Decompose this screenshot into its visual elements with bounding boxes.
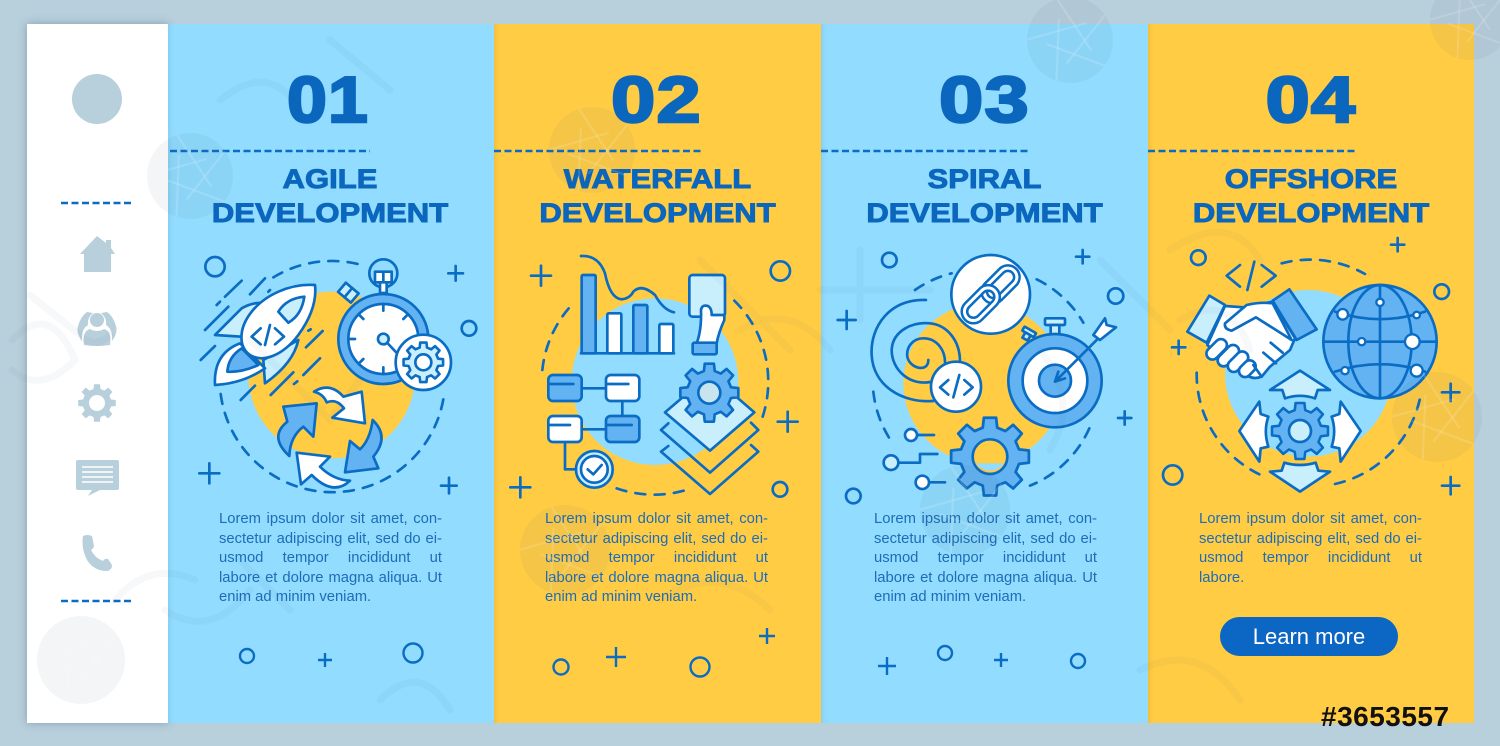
step number: 01: [287, 63, 369, 136]
step number: 02: [611, 63, 702, 136]
icon: settings gear: [78, 384, 116, 422]
heading: [1193, 164, 1430, 228]
body text: Lorem ipsum dolor sit amet, con-: [1199, 511, 1422, 527]
heading: OFFSHORE: [1225, 164, 1397, 194]
illustration: spiral, link, target, gear: [838, 250, 1131, 503]
heading: [212, 164, 448, 228]
illustration: handshake, globe, gear: [1163, 238, 1459, 494]
panel: navigation sidebar: [27, 24, 168, 723]
heading: SPIRAL: [928, 164, 1041, 194]
icon: home: [80, 236, 115, 272]
heading: DEVELOPMENT: [866, 198, 1103, 228]
panel: 01 agile development: [168, 24, 494, 723]
button: learn more: Learn more: [1253, 624, 1365, 649]
heading: AGILE: [283, 164, 377, 194]
body text: sectetur adipiscing elit, sed do ei-: [874, 531, 1097, 547]
logo placeholder circle: [72, 74, 122, 124]
panel: 02 waterfall development: [494, 24, 821, 723]
heading: DEVELOPMENT: [539, 198, 776, 228]
icon: phone: [82, 535, 112, 571]
body text: usmod tempor incididunt ut: [545, 550, 768, 566]
body text: labore.: [1199, 570, 1244, 586]
decorative circles and plus signs: [554, 628, 775, 676]
body text: labore et dolore magna aliqua. Ut: [545, 570, 768, 586]
stock id label: #3653557: [1321, 701, 1450, 732]
body text: Lorem ipsum dolor sit amet, con-: [219, 511, 442, 527]
heading: [539, 164, 776, 228]
body text: sectetur adipiscing elit, sed do ei-: [545, 531, 768, 547]
step number: 04: [1266, 63, 1356, 136]
illustration: waterfall charts and flow: [510, 256, 798, 497]
body text: labore et dolore magna aliqua. Ut: [874, 570, 1097, 586]
body text: enim ad minim veniam.: [874, 589, 1026, 605]
body text: Lorem ipsum dolor sit amet, con-: [545, 511, 768, 527]
body text: sectetur adipiscing elit, sed do ei-: [219, 531, 442, 547]
body text: usmod tempor incididunt ut: [1199, 550, 1422, 566]
body text: [545, 511, 768, 605]
body text: enim ad minim veniam.: [219, 589, 371, 605]
body text: Lorem ipsum dolor sit amet, con-: [874, 511, 1097, 527]
panel: 03 spiral development: [821, 24, 1148, 723]
body text: enim ad minim veniam.: [545, 589, 697, 605]
body text: [874, 511, 1097, 605]
button: learn more: [1220, 617, 1398, 656]
heading: DEVELOPMENT: [212, 198, 448, 228]
panel: 04 offshore development: [1148, 24, 1474, 723]
icon: message: [76, 460, 119, 496]
heading: [866, 164, 1103, 228]
icon: people: [78, 312, 116, 346]
step number: 03: [939, 63, 1030, 136]
body text: [219, 511, 442, 605]
body text: labore et dolore magna aliqua. Ut: [219, 570, 442, 586]
body text: usmod tempor incididunt ut: [874, 550, 1097, 566]
decorative circles and plus signs: [240, 644, 422, 667]
decorative circles and plus signs: [878, 646, 1085, 675]
heading: DEVELOPMENT: [1193, 198, 1429, 228]
body text: sectetur adipiscing elit, sed do ei-: [1199, 531, 1422, 547]
body text: [1199, 511, 1422, 586]
illustration: agile rocket, stopwatch, arrows: [199, 257, 476, 493]
body text: usmod tempor incididunt ut: [219, 550, 442, 566]
heading: WATERFALL: [564, 164, 751, 194]
